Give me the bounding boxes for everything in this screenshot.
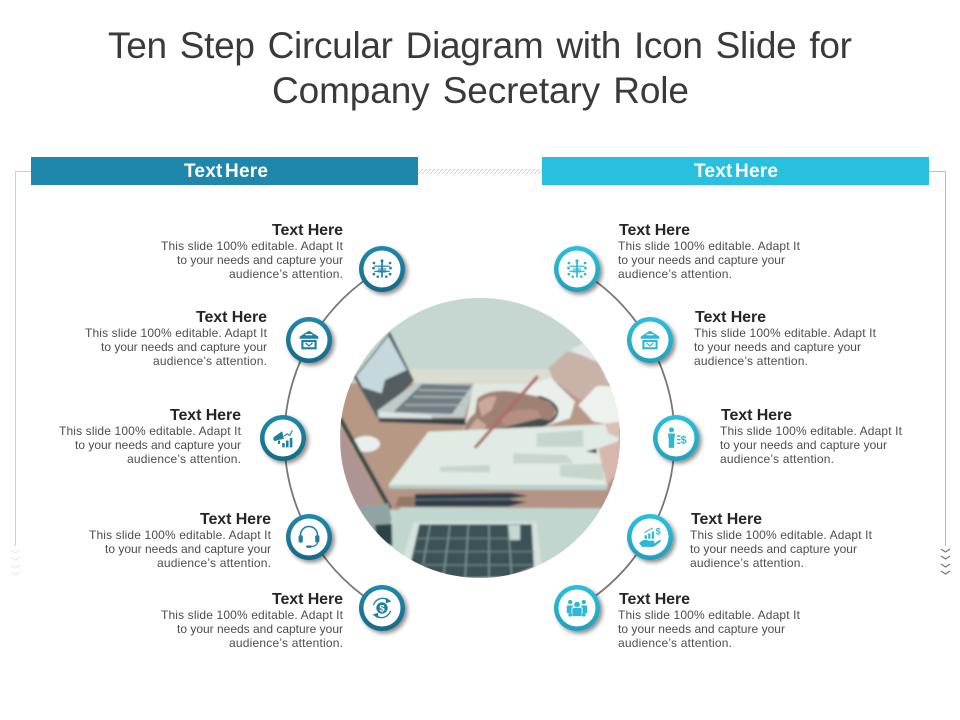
text block: left 5 (161, 591, 344, 650)
text block: right 1 (618, 222, 801, 281)
text block: right 3 (720, 407, 903, 466)
text block: right 4: audience’s attention. (690, 556, 804, 570)
node: left 1 (359, 246, 405, 292)
text block: left 1 (161, 222, 344, 281)
left arc (284, 269, 382, 608)
node: left 3 (260, 415, 306, 461)
text block: right 3: This slide 100% editable. Adapt It (720, 424, 903, 438)
text block: left 3: audience’s attention. (127, 452, 241, 466)
left header bar: Text Here (184, 161, 268, 182)
text block: right 1: This slide 100% editable. Adapt It (618, 239, 801, 253)
text block: left 2 (85, 309, 268, 368)
text block: right 2: This slide 100% editable. Adapt It (694, 326, 877, 340)
node: right 3 (653, 415, 699, 461)
right header bar (542, 157, 929, 185)
text block: right 2: to your needs and capture your (694, 340, 861, 354)
left header bar (31, 157, 418, 185)
icon: headset (299, 527, 319, 548)
title (108, 25, 852, 111)
text block: left 2: This slide 100% editable. Adapt It (85, 326, 268, 340)
text block: right 4: This slide 100% editable. Adapt It (690, 528, 873, 542)
text block: right 2: Text Here (695, 309, 766, 326)
title: Ten Step Circular Diagram with Icon Slide for (108, 25, 852, 66)
node: right 5 (554, 585, 600, 631)
icon: building (300, 331, 318, 349)
text block: left 4: Text Here (200, 511, 271, 528)
text block: left 2: audience’s attention. (153, 354, 267, 368)
text block: left 2: Text Here (196, 309, 267, 326)
title: Company Secretary Role (272, 70, 689, 111)
text block: left 5: to your needs and capture your (177, 622, 343, 636)
text block: right 2: audience’s attention. (694, 354, 808, 368)
icon: building (641, 331, 659, 349)
node: right 2 (627, 317, 673, 363)
text block: right 3: Text Here (721, 407, 792, 424)
node: left 2 (286, 317, 332, 363)
text block: right 5 (618, 591, 801, 650)
text block: left 1: to your needs and capture your (177, 253, 343, 267)
icon: team (567, 600, 587, 617)
node: right 1 (554, 246, 600, 292)
text block: right 1: to your needs and capture your (618, 253, 785, 267)
text block: right 3: audience’s attention. (720, 452, 834, 466)
text block: right 1: audience’s attention. (618, 267, 732, 281)
node: left 4 (286, 514, 332, 560)
text block: right 5: to your needs and capture your (618, 622, 785, 636)
left bracket line with chevrons (11, 172, 31, 575)
text block: left 2: to your needs and capture your (101, 340, 267, 354)
hatched connector between headers (418, 169, 542, 174)
central photo (340, 290, 630, 585)
node: left 5 (359, 585, 405, 631)
right arc (577, 269, 675, 608)
text block: right 5: This slide 100% editable. Adapt It (618, 608, 801, 622)
text block: left 4: This slide 100% editable. Adapt It (89, 528, 272, 542)
text block: left 4: audience’s attention. (157, 556, 271, 570)
text block: right 1: Text Here (619, 222, 690, 239)
icon: network (372, 259, 392, 278)
text block: right 4: to your needs and capture your (690, 542, 857, 556)
text block: left 3: This slide 100% editable. Adapt It (59, 424, 242, 438)
text block: left 1: audience’s attention. (229, 267, 343, 281)
text block: left 4 (89, 511, 272, 570)
icon: megaphone and chart (273, 430, 292, 447)
text block: left 1: Text Here (272, 222, 343, 239)
text block: right 3: to your needs and capture your (720, 438, 887, 452)
right header bar: Text Here (694, 161, 778, 182)
text block: left 3: to your needs and capture your (75, 438, 241, 452)
icon: presenter with dollar (668, 427, 687, 448)
text block: left 3 (59, 407, 242, 466)
text block: left 3: Text Here (170, 407, 241, 424)
text block: left 5: audience’s attention. (229, 636, 343, 650)
text block: right 4: Text Here (691, 511, 762, 528)
text block: right 4 (690, 511, 873, 570)
text block: left 4: to your needs and capture your (105, 542, 271, 556)
text block: right 5: audience’s attention. (618, 636, 732, 650)
text block: right 2 (694, 309, 877, 368)
icon: hand with chart (639, 526, 661, 547)
node: right 4 (627, 514, 673, 560)
right bracket line with chevrons (929, 172, 950, 574)
icon: network (567, 259, 587, 278)
text block: left 5: This slide 100% editable. Adapt It (161, 608, 344, 622)
icon: dollar cycle (372, 598, 392, 618)
text block: right 5: Text Here (619, 591, 690, 608)
text block: left 1: This slide 100% editable. Adapt It (161, 239, 344, 253)
text block: left 5: Text Here (272, 591, 343, 608)
